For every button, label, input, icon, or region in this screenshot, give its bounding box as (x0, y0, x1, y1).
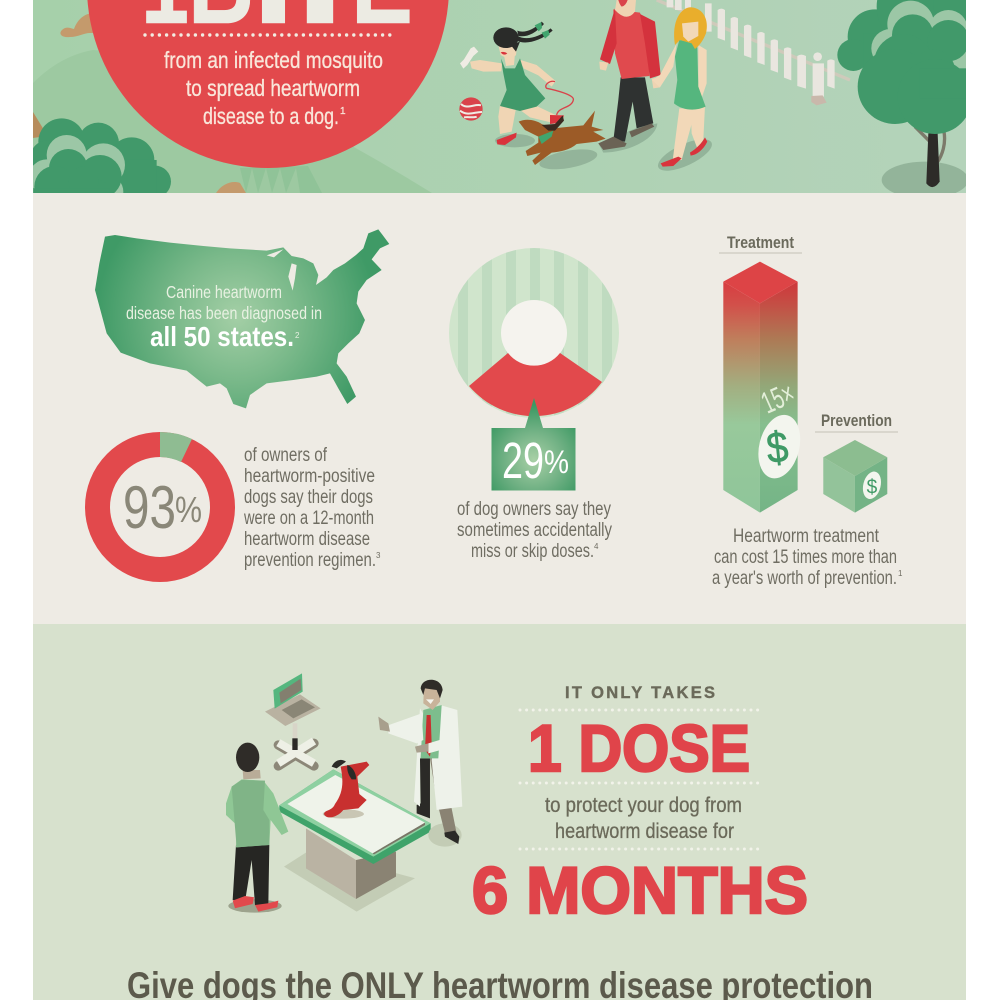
owner (226, 743, 288, 913)
dog (519, 111, 606, 173)
sitting dog (323, 760, 369, 819)
text: protect (545, 796, 741, 838)
rock upper (60, 14, 93, 38)
map text: disease has been diagnosed in (126, 303, 322, 323)
donut: 93 percent (98, 432, 222, 570)
text: cost caption: a year's worth of prevention. (712, 568, 897, 589)
grass (240, 166, 322, 193)
dotted rule (520, 782, 760, 784)
heading: 1 dose: 1 DOSE (528, 711, 750, 785)
headline (146, 0, 410, 24)
panel: statistics (33, 193, 966, 624)
bar: treatment column (723, 262, 807, 513)
girl (460, 22, 564, 147)
fence (657, 0, 850, 105)
map text: Canine heartworm (166, 282, 282, 302)
tree (837, 0, 966, 193)
dotted rule (520, 848, 760, 850)
panel: hero scene (33, 0, 966, 193)
text: 29 percent caption: of dog owners say they (457, 499, 611, 520)
text: 93 percent caption: prevention regimen. (244, 550, 376, 571)
text: cost caption: can cost 15 times more than (714, 547, 897, 568)
map text (126, 282, 322, 352)
subhead text: disease to a dog. (203, 103, 339, 129)
text: protect: heartworm disease for (555, 819, 734, 843)
text: 93 percent caption: heartworm-positive (244, 466, 375, 487)
text: 29 percent caption (457, 499, 612, 562)
ball (459, 97, 483, 121)
panel: one dose (33, 624, 966, 1000)
text: 29 percent caption: sometimes accidentally (457, 520, 612, 541)
donut: 29 percent (449, 248, 619, 418)
rock lower (216, 182, 246, 193)
text: 93 percent caption: 3 (376, 551, 381, 560)
ultrasound cart (265, 673, 321, 766)
red circle badge (87, 0, 449, 168)
dotted rule (145, 33, 396, 37)
dotted rule (520, 708, 760, 712)
text: 29 percent caption: miss or skip doses. (471, 541, 594, 562)
coin icon (752, 410, 807, 483)
callout: 29 percent: 29 (502, 432, 544, 489)
donut: 93 percent: % (175, 489, 202, 530)
label: prevention: Prevention (821, 411, 892, 430)
coin icon: $ (867, 475, 878, 498)
subhead text: from an infected mosquito (164, 47, 383, 73)
text: 93 percent caption (243, 445, 381, 571)
text: 93 percent caption: heartworm disease (244, 529, 370, 550)
callout: 29 percent: % (544, 444, 569, 480)
multiplier label: 15× (757, 377, 800, 421)
subhead text: 1 (340, 106, 346, 117)
text: 93 percent caption: of owners of (244, 445, 328, 466)
map text: 2 (295, 331, 300, 340)
man (598, 0, 662, 153)
coin icon: $ (764, 423, 791, 473)
woman (656, 7, 712, 171)
subhead text (164, 47, 383, 129)
hill (33, 50, 432, 193)
map text: all 50 states. (150, 321, 294, 352)
veterinarian (378, 680, 462, 847)
table (279, 769, 431, 912)
heading: it only takes: IT ONLY TAKES (565, 684, 715, 702)
map of USA (95, 229, 389, 408)
leash (546, 81, 573, 115)
bar: prevention cube (823, 440, 887, 513)
heading: 6 months: 6 MONTHS (472, 853, 808, 927)
text: 93 percent caption: dogs say their dogs (244, 487, 373, 508)
subhead text: to spread heartworm (186, 75, 360, 101)
text: cost caption: 1 (898, 569, 903, 578)
label: treatment: Treatment (727, 233, 794, 252)
bush (33, 118, 171, 193)
text: cost caption: Heartworm treatment (733, 526, 880, 547)
illustration: vet exam (226, 673, 462, 913)
donut: 93 percent: 93 (123, 474, 176, 541)
text: cost caption (712, 526, 903, 589)
callout: 29 percent (492, 398, 576, 490)
family (459, 0, 716, 177)
text: 29 percent caption: 4 (594, 542, 599, 551)
rock left (33, 112, 44, 138)
text: protect: to protect your dog from (545, 793, 742, 817)
text: 93 percent caption: were on a 12-month (243, 508, 374, 529)
